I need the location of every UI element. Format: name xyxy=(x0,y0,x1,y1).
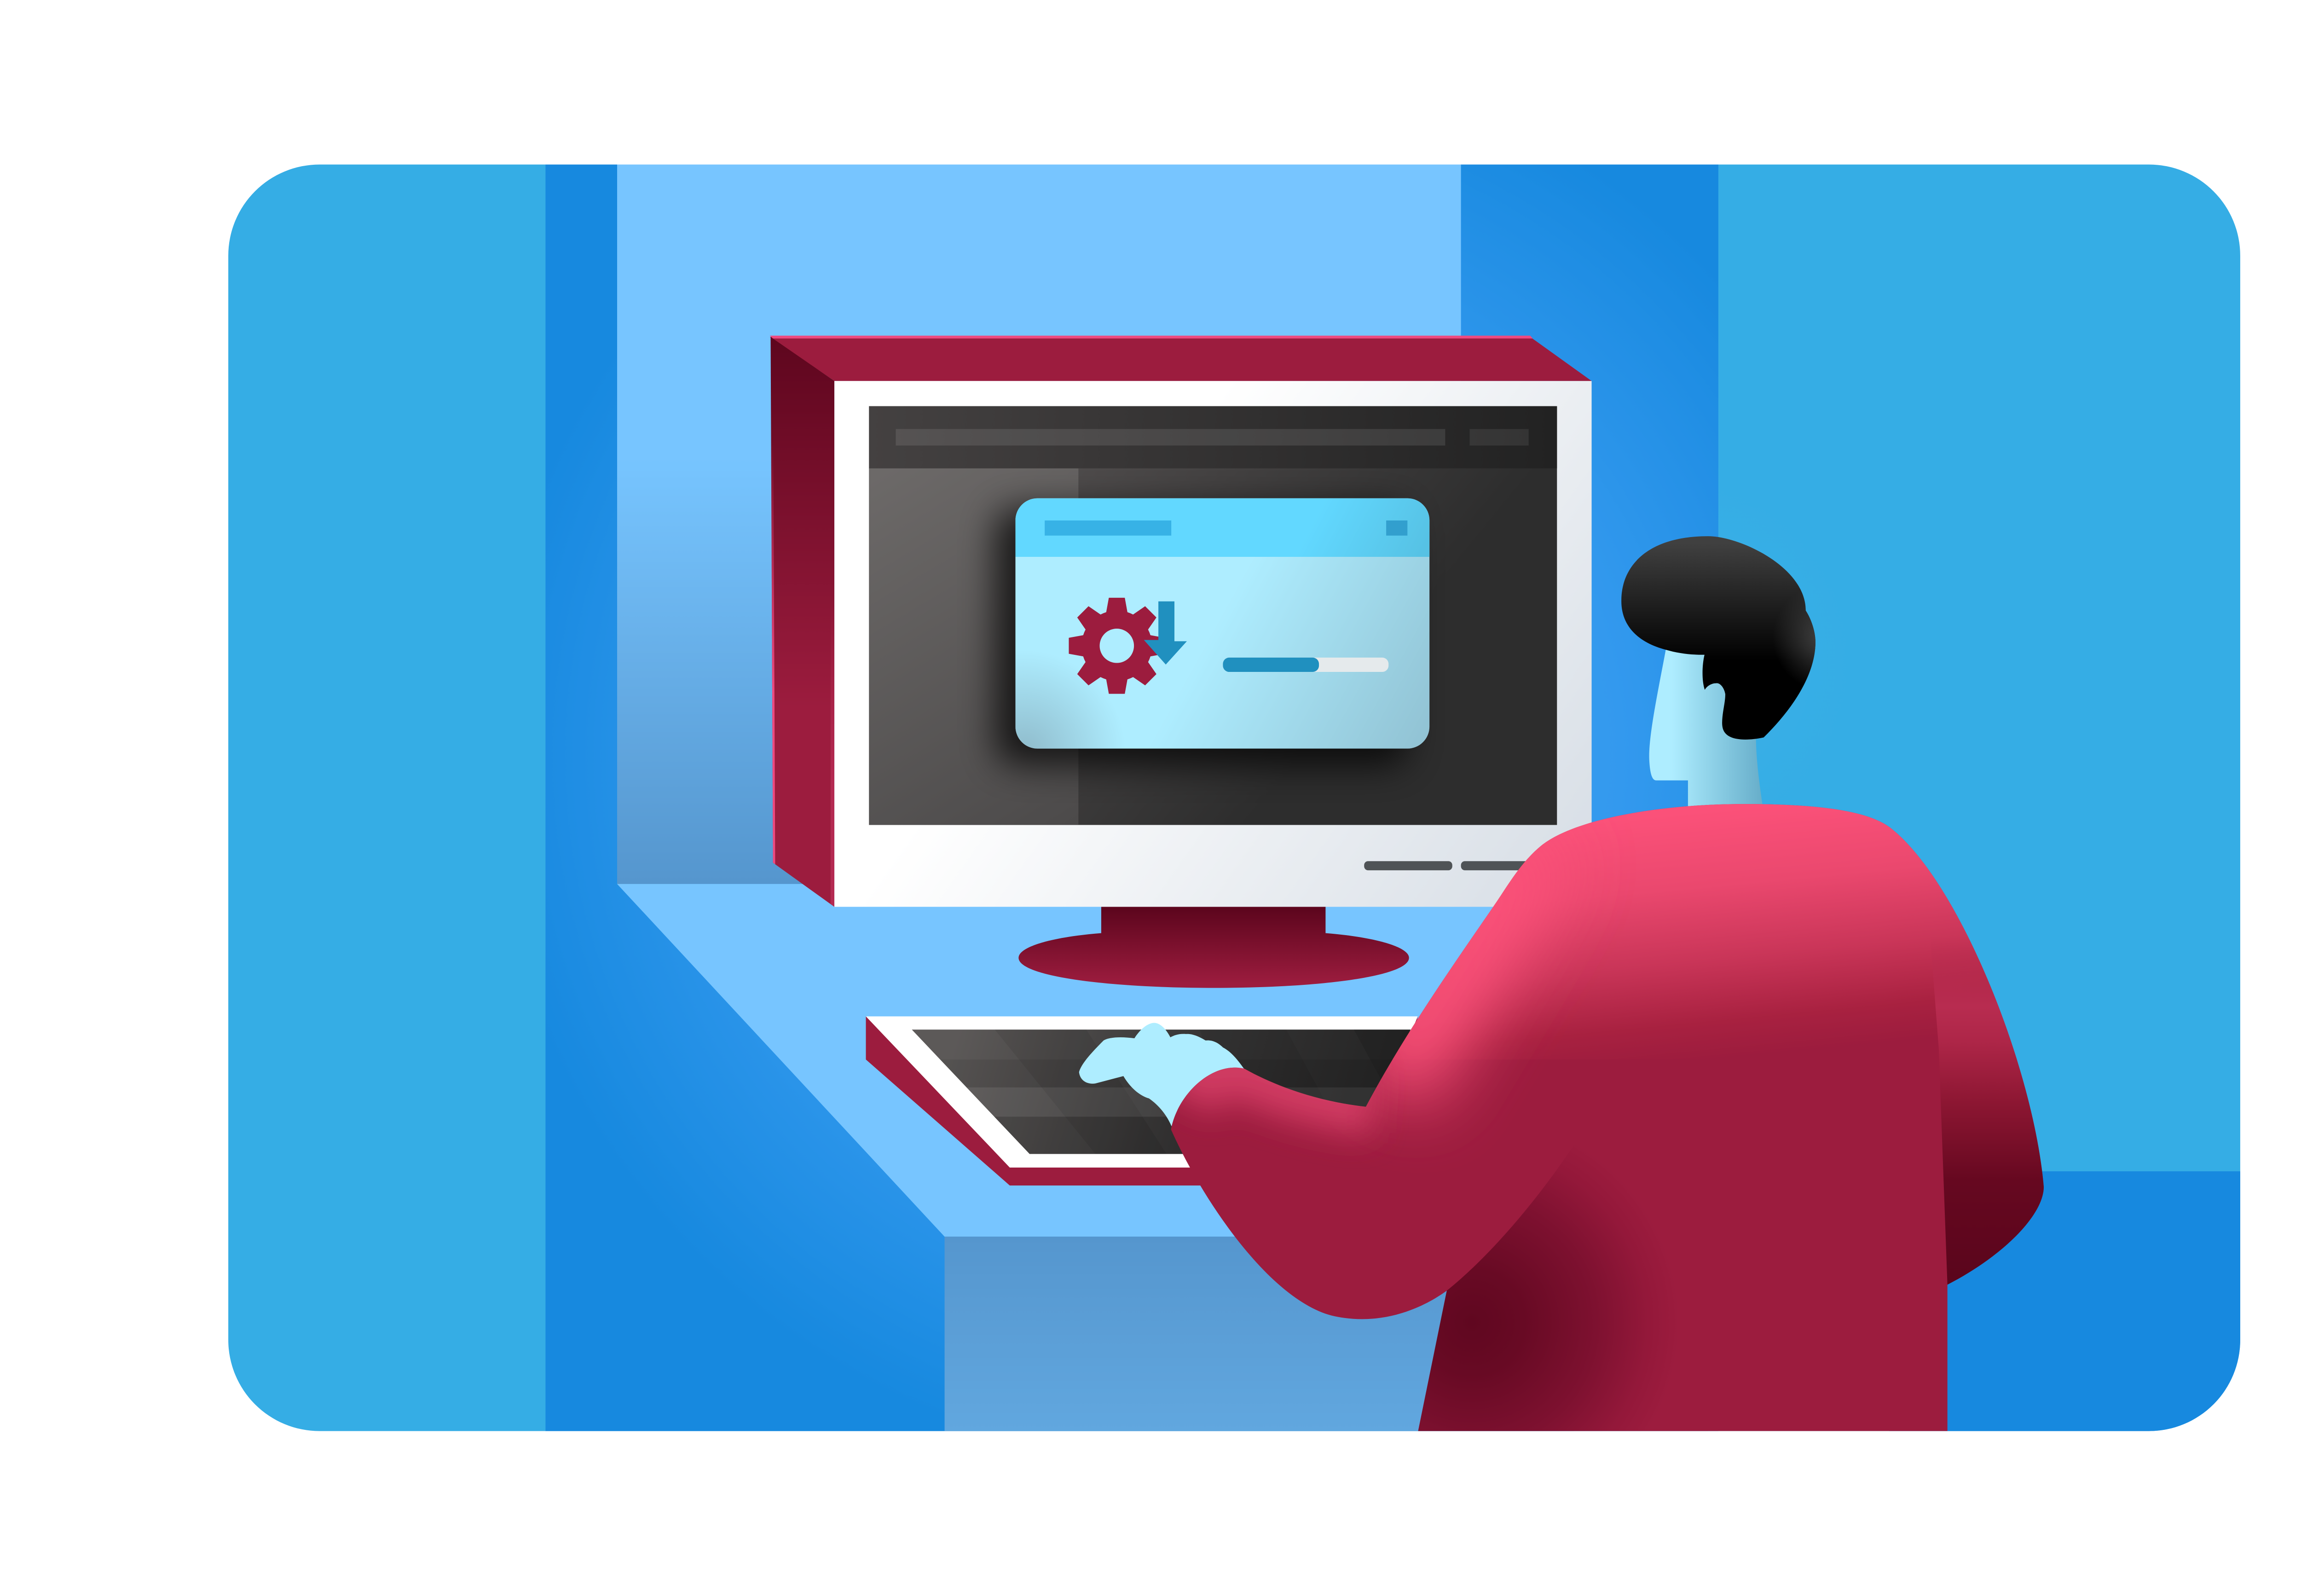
upper arm highlight xyxy=(1385,834,1530,1086)
hair xyxy=(1613,529,1821,746)
icon: gear xyxy=(1069,598,1165,694)
icon: download arrow xyxy=(1144,601,1187,665)
monitor front bezel xyxy=(834,381,1592,907)
back wall xyxy=(617,164,1461,884)
front drop xyxy=(945,1237,1574,1432)
background panel xyxy=(228,164,2242,1433)
monitor stand xyxy=(1018,907,1409,988)
illustration xyxy=(228,165,2240,1431)
dialog body xyxy=(1015,498,1429,749)
keyboard top frame xyxy=(866,1017,1418,1168)
screen sidebar xyxy=(869,468,1078,825)
monitor top face xyxy=(770,337,1592,381)
shirt base xyxy=(1157,795,2054,1433)
glow on right wall xyxy=(1718,164,1923,1171)
lower torso shadow xyxy=(1409,1123,1708,1433)
screen xyxy=(869,406,1557,825)
dialog shadow xyxy=(995,509,1407,765)
shoulders gradient xyxy=(1157,795,2054,1059)
central dark blue band xyxy=(545,164,1718,1433)
monitor xyxy=(770,335,1592,988)
right arm xyxy=(1930,937,2054,1284)
hand xyxy=(1079,1023,1244,1126)
neck and face xyxy=(1649,646,1763,809)
monitor left face xyxy=(771,337,834,907)
screen top bar xyxy=(869,406,1557,468)
shirt xyxy=(1157,795,2054,1433)
lower right dark block xyxy=(1889,1171,2242,1433)
keyboard xyxy=(866,1017,1418,1185)
dialog window xyxy=(995,498,1429,765)
keyboard base xyxy=(866,1017,1418,1185)
person xyxy=(1157,529,2054,1433)
sleeve highlight xyxy=(1187,1066,1373,1102)
monitor buttons xyxy=(1364,861,1555,870)
dialog title bar xyxy=(1015,498,1429,557)
wall shadow xyxy=(617,457,853,884)
floor xyxy=(617,884,1590,1237)
keyboard keys xyxy=(912,1029,1411,1154)
progress bar xyxy=(1223,658,1388,672)
